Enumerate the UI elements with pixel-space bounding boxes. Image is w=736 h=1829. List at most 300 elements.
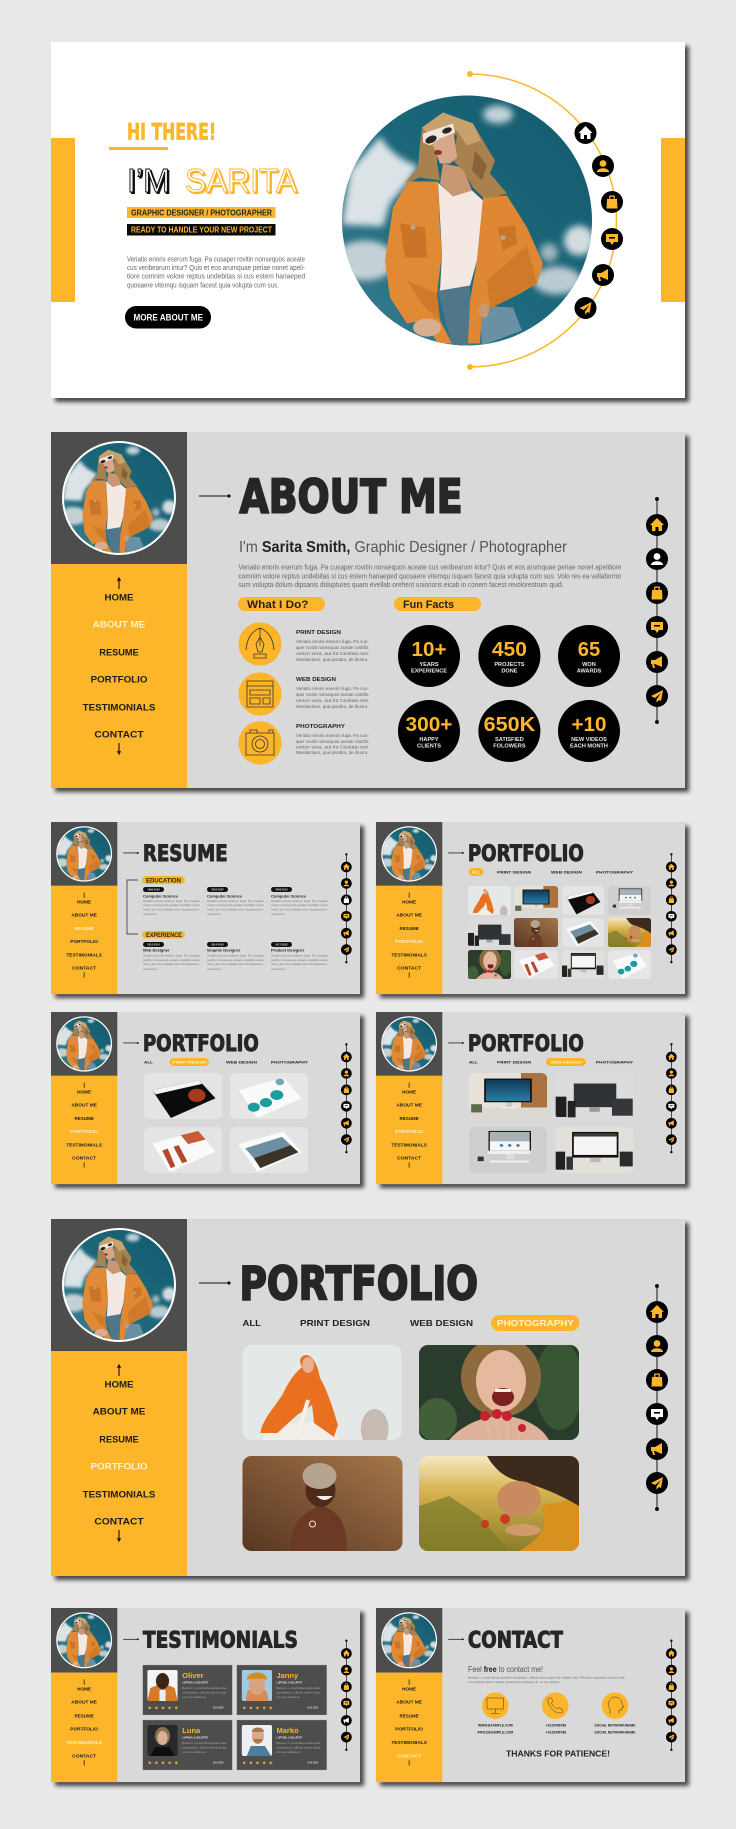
testimonial: Janny: ★★★★★ — [242, 1706, 274, 1712]
navigation: TESTIMONIALS — [66, 1740, 102, 1745]
service: print design: Musitactium, qua ipsabto, de ibusru. — [296, 657, 368, 662]
service: web design: Musitactium, qua ipsabto, de ibusru. — [296, 704, 368, 709]
sidebar bottom — [376, 1673, 442, 1782]
role badge: GRAPHIC DESIGNER / PHOTOGRAPHER — [131, 208, 272, 218]
navigation: ABOUT ME — [93, 1406, 145, 1416]
title arrow — [448, 1638, 464, 1640]
experience entries: vera, aut lnt Cestiatu sen Musitactium, — [271, 962, 328, 966]
navigation: TESTIMONIALS — [66, 953, 102, 958]
panel background — [51, 1219, 685, 1576]
stat: projects: 450 — [492, 639, 527, 661]
navigation — [391, 1679, 427, 1765]
navigation — [66, 1679, 102, 1765]
navigation: HOME — [402, 1089, 416, 1094]
service: print design: aper rovitin nonsequos aceate cusEfla — [296, 645, 369, 650]
intro paragraph: cus veribearum intur? Quis et eos arumquae periae nonet apeli- — [127, 265, 306, 272]
experience entries: 2012-2014 — [147, 942, 160, 946]
intro paragraph: quosaere vitemqu isquam facest quia volupta cum sus. — [127, 282, 279, 290]
stat: videos: +10 — [572, 714, 606, 736]
panel shadow — [55, 826, 364, 998]
stat: videos — [558, 700, 620, 762]
sidebar top — [376, 1012, 442, 1076]
testimonial: Luna: ★★★★★ — [148, 1760, 179, 1766]
filter tabs: ALL — [144, 1060, 154, 1064]
panel background — [51, 1012, 360, 1184]
navigation: ABOUT ME — [93, 620, 145, 630]
nav icons — [574, 122, 623, 319]
education pill: EDUCATION — [146, 878, 181, 884]
left accent bar — [51, 138, 75, 302]
panel frame — [376, 1608, 685, 1782]
service: web design — [238, 672, 369, 716]
education entries: Veriatio erioris eserum fuga. Pa cusaper — [207, 899, 264, 903]
stat: experience: EXPERIENCE — [411, 669, 447, 675]
navigation: CONTACT — [94, 730, 144, 740]
navigation: RESUME — [400, 1713, 419, 1718]
testimonial: Oliver: LUPTAM LA VOLUPTAT — [182, 1682, 209, 1684]
name heading: I’M — [128, 164, 172, 202]
sidebar bottom — [376, 886, 442, 994]
navigation: PORTFOLIO — [395, 1129, 424, 1134]
navigation: TESTIMONIALS — [83, 1490, 155, 1500]
image: woman in orange — [242, 1345, 402, 1449]
panel background — [376, 822, 685, 994]
filter tabs: PRINT DESIGN — [300, 1318, 370, 1328]
navigation — [391, 1083, 427, 1168]
intro paragraph: tiore comnim volore reptus undebitas si cus estem hariaeped — [127, 274, 305, 280]
education entries: rovitin nonsequos aceate cusEfla verion — [207, 903, 264, 907]
title: RESUME — [143, 841, 228, 867]
testimonial: Oliver: orum eos editata est. — [182, 1695, 207, 1699]
experience entries: 2014-2016 — [211, 942, 224, 946]
service: photography: PHOTOGRAPHY — [296, 724, 345, 730]
fun facts heading — [394, 597, 481, 611]
testimonial: Oliver — [143, 1665, 232, 1715]
service: photography: Veriatio erioris eserum fuga. Pa cus- — [296, 733, 369, 738]
panel: portfolio all — [376, 822, 689, 998]
navigation: HOME — [104, 592, 134, 602]
title arrow — [448, 852, 464, 854]
education entries: 2003-2007 — [211, 888, 224, 892]
sidebar top — [51, 1012, 117, 1076]
panel frame — [376, 822, 685, 994]
experience entries: qua ibusru. — [143, 967, 157, 971]
contact: phone — [542, 1692, 569, 1734]
testimonial: Marko: LUPTAM LA VOLUPTAT — [276, 1736, 303, 1740]
experience entries: Product Designer — [271, 948, 305, 952]
service: web design: verion vera, aut lnt Cestiatu sen — [296, 698, 369, 703]
fun facts heading: Fun Facts — [403, 599, 454, 611]
icon timeline — [646, 1284, 668, 1511]
panel background — [51, 1608, 360, 1782]
navigation — [391, 893, 427, 978]
navigation: RESUME — [75, 1713, 94, 1718]
contact paragraph: Bustem, s modi latius apelites doluptatur, officat eatur quas sint editatur sim. Pariatur magnitat consed modi — [468, 1675, 625, 1679]
stat: experience — [398, 625, 460, 687]
stat: clients: 300+ — [406, 714, 452, 736]
button: MORE ABOUT ME — [134, 312, 203, 322]
navigation: CONTACT — [94, 1516, 144, 1526]
icon timeline — [341, 1043, 352, 1153]
title: TESTIMONIALS — [143, 1627, 298, 1653]
navigation: CONTACT — [72, 1753, 96, 1758]
education entries: vera, aut lnt Cestiatu sen Musitactium, — [271, 908, 328, 912]
navigation — [83, 578, 155, 754]
about paragraph: comnim volore reptus undebitas si cus estem hariaeped quosaere vitemqu isquam facest quia volupta cum sus. Volo res ea vellaborror — [238, 574, 622, 580]
panel shadow — [55, 46, 689, 402]
name heading — [127, 163, 299, 202]
education entries: rovitin nonsequos aceate cusEfla verion — [143, 903, 200, 907]
navigation: PORTFOLIO — [395, 939, 424, 944]
image: smiling woman — [242, 1456, 402, 1551]
filter tabs: PHOTOGRAPHY — [596, 870, 633, 874]
panel shadow — [55, 436, 689, 792]
education entries: Computer Science — [271, 894, 307, 898]
sidebar bottom — [51, 1076, 117, 1184]
icon timeline — [666, 1043, 677, 1153]
filter tabs: PHOTOGRAPHY — [271, 1060, 308, 1064]
panel frame — [51, 1012, 360, 1184]
service: photography: aper rovitin nonsequos aceate cusEfla — [296, 739, 369, 744]
navigation: TESTIMONIALS — [391, 953, 427, 958]
experience pill: EXPERIENCE — [146, 933, 182, 939]
navigation: RESUME — [400, 926, 419, 931]
stat: awards: WON — [582, 662, 596, 668]
filter tabs: PRINT DESIGN — [497, 1060, 531, 1064]
testimonial: Luna: 05.6.2022 — [213, 1762, 224, 1764]
title: PORTFOLIO — [468, 841, 584, 867]
navigation: PORTFOLIO — [91, 1462, 147, 1472]
panel shadow — [55, 1612, 364, 1786]
service: web design: aper rovitin nonsequos aceate cusEfla — [296, 692, 369, 697]
filter tabs: ALL — [242, 1318, 261, 1328]
experience entries: 2017-2022 — [275, 942, 288, 946]
avatar — [60, 1229, 176, 1341]
panel: resume — [51, 822, 364, 998]
contact: web: INFO@EXAMPLE.COM — [477, 1730, 513, 1734]
experience entries: Graphic Designer — [207, 948, 241, 952]
testimonial: Marko: 05.6.2022 — [308, 1762, 319, 1764]
navigation: ABOUT ME — [71, 1700, 97, 1705]
about paragraph: Veriatio erioris eserum fuga. Pa cusaper rovitin nonsequos aceate cus veribearum intur? Quis et eos arumquae periae nonet apelitiore — [238, 564, 622, 572]
navigation — [66, 893, 102, 978]
stat: followers: SATISFIED — [495, 737, 524, 743]
filter tabs: PHOTOGRAPHY — [497, 1318, 574, 1328]
navigation: TESTIMONIALS — [83, 702, 155, 712]
contact paragraph: non itaquis ipsum rationi nonsenimo antisque in, ni cus dolore. — [468, 1680, 560, 1684]
greeting underline — [109, 147, 168, 150]
title arrow — [199, 494, 231, 498]
education pill — [142, 876, 185, 884]
panel shadow — [380, 1016, 689, 1188]
testimonial: Janny: orum eos editata est. — [276, 1695, 301, 1699]
stat: awards — [558, 625, 620, 687]
filter tabs — [469, 1058, 633, 1066]
sidebar bottom — [376, 1076, 442, 1184]
panel shadow — [380, 1612, 689, 1786]
stat: experience: YEARS — [419, 662, 439, 668]
panel background — [376, 1012, 685, 1184]
navigation: CONTACT — [397, 966, 421, 971]
testimonial: Janny: Bustem, s modi latius apitas diae — [276, 1686, 321, 1690]
stat: videos: EACH MONTH — [570, 744, 608, 750]
panel background — [51, 42, 685, 398]
navigation: RESUME — [400, 1116, 419, 1121]
education entries: rovitin nonsequos aceate cusEfla verion — [271, 903, 328, 907]
contact: social: SOCIAL NETWORK/NAME — [595, 1724, 636, 1728]
icon timeline — [666, 1640, 677, 1751]
filter tabs: WEB DESIGN — [226, 1060, 257, 1064]
panel background — [51, 822, 360, 994]
stat: clients: CLIENTS — [417, 744, 441, 750]
navigation: HOME — [104, 1380, 134, 1390]
sidebar top — [51, 822, 117, 886]
panel content — [51, 1219, 685, 1576]
panel content — [51, 432, 685, 788]
experience entries — [143, 942, 328, 971]
service: photography: verion vera, aut lnt Cestiatu sen — [296, 744, 369, 750]
navigation: HOME — [402, 899, 416, 904]
navigation: TESTIMONIALS — [391, 1143, 427, 1148]
stat: followers — [478, 700, 540, 762]
experience entries: rovitin nonsequos aceate cusEfla verion — [271, 958, 328, 962]
stat: followers: 650K — [484, 714, 536, 736]
avatar — [55, 1613, 112, 1668]
stat: awards: AWARDS — [577, 669, 602, 675]
icon timeline — [646, 497, 668, 724]
intro paragraph: Veriatio erioris eserum fuga. Pa cusaper rovitin nonsequos aceate — [127, 256, 305, 264]
title: CONTACT — [468, 1627, 563, 1653]
experience entries: rovitin nonsequos aceate cusEfla verion — [207, 958, 264, 962]
title arrow — [448, 1042, 464, 1044]
education entries: 2008-2012 — [275, 888, 288, 892]
filter tabs: PRINT DESIGN — [172, 1060, 207, 1064]
navigation: CONTACT — [397, 1156, 421, 1161]
contact: web — [477, 1692, 513, 1734]
name heading: SARITA — [185, 163, 298, 200]
service: photography — [238, 721, 369, 765]
education entries: vera, aut lnt Cestiatu sen Musitactium, — [143, 908, 200, 912]
navigation: PORTFOLIO — [91, 674, 147, 684]
education entries: Computer Science — [207, 894, 243, 898]
avatar — [55, 1017, 112, 1071]
title arrow — [199, 1281, 231, 1285]
testimonial: Janny: 05.6.2022 — [308, 1706, 319, 1710]
sidebar top — [51, 432, 187, 564]
icon timeline — [341, 853, 352, 963]
image: woman with berries — [417, 1337, 583, 1442]
name heading: SARITA — [186, 164, 299, 202]
name heading: I’M — [127, 163, 170, 200]
testimonial: Marko: Marko — [276, 1726, 299, 1735]
experience entries: Veriatio erioris eserum fuga. Pa cusaper — [143, 954, 200, 958]
testimonial: Janny — [237, 1665, 327, 1715]
contact: social — [595, 1692, 636, 1734]
testimonial: Marko: orum eos editata est. — [276, 1750, 301, 1754]
navigation: PORTFOLIO — [395, 1726, 424, 1731]
testimonial: Marko — [237, 1720, 327, 1770]
testimonial: Oliver: ★★★★★ — [148, 1706, 179, 1712]
filter tabs: PHOTOGRAPHY — [596, 1060, 633, 1064]
contact: phone: +0123456789 — [546, 1730, 566, 1734]
sidebar top — [376, 822, 442, 886]
filter tabs: ALL — [472, 870, 481, 874]
testimonial: Marko: voluptatur, officat eatur quas — [276, 1746, 321, 1750]
navigation: ABOUT ME — [396, 913, 422, 918]
testimonial: Janny: LUPTAM LA VOLUPTAT — [276, 1682, 303, 1684]
navigation: RESUME — [75, 926, 94, 931]
navigation — [83, 1365, 155, 1541]
greeting heading: HI THERE! — [127, 120, 216, 146]
about paragraph: sum volupta dolum dipsanis doluptures quam evellab orehent uniorioris eicab in conem facest revolorestrum quid. — [238, 582, 564, 589]
panel background — [376, 1608, 685, 1782]
panel: contact — [376, 1608, 689, 1786]
avatar — [380, 1613, 437, 1668]
service: web design: Veriatio erioris eserum fuga. Pa cus- — [296, 686, 369, 691]
what i do heading — [238, 597, 325, 611]
image grid — [467, 886, 651, 980]
navigation: ABOUT ME — [71, 913, 97, 918]
stat: projects: DONE — [501, 669, 518, 675]
stat: experience: 10+ — [412, 639, 446, 661]
avatar — [55, 827, 112, 881]
panel shadow — [55, 1223, 689, 1580]
experience entries: qua ibusru. — [207, 967, 221, 971]
icon timeline — [666, 853, 677, 963]
stat: videos: NEW VIDEOS — [571, 737, 607, 743]
education entries: qua ibusru. — [271, 912, 285, 916]
contact: web: WWW.EXAMPLE.COM — [478, 1724, 513, 1728]
navigation: RESUME — [75, 1116, 94, 1121]
filter tabs: WEB DESIGN — [550, 1060, 582, 1064]
stat: clients — [398, 700, 460, 762]
testimonial: Marko: ★★★★★ — [242, 1760, 274, 1766]
service: photography: Musitactium, qua ipsabto, de ibusru. — [296, 750, 368, 755]
stat: followers: FOLOWERS — [493, 744, 526, 750]
experience pill — [142, 931, 185, 939]
navigation: HOME — [402, 1686, 416, 1691]
navigation — [66, 1083, 102, 1168]
testimonial: Luna: Bustem, s modi latius apitas diae — [182, 1741, 227, 1745]
service: print design — [238, 622, 369, 666]
sidebar top — [51, 1608, 117, 1673]
title: PORTFOLIO — [143, 1031, 259, 1057]
stat: projects — [478, 625, 540, 687]
testimonial: Janny: Janny — [276, 1671, 299, 1680]
navigation: ABOUT ME — [71, 1103, 97, 1108]
service: print design: Veriatio erioris eserum fuga. Pa cus- — [296, 639, 369, 644]
title: PORTFOLIO — [240, 1256, 478, 1310]
panel background — [51, 432, 685, 788]
testimonial: Oliver: Oliver — [182, 1671, 204, 1680]
navigation: ABOUT ME — [396, 1700, 422, 1705]
service: web design: WEB DESIGN — [296, 677, 336, 683]
stat: clients: HAPPY — [419, 737, 439, 743]
timeline bracket — [127, 880, 138, 934]
navigation: CONTACT — [397, 1753, 421, 1758]
sidebar top — [376, 1608, 442, 1673]
panel: testimonials — [51, 1608, 364, 1786]
filter tabs — [144, 1058, 308, 1066]
navigation: CONTACT — [72, 966, 96, 971]
arc — [467, 71, 616, 370]
title: PORTFOLIO — [468, 1031, 584, 1057]
experience entries: qua ibusru. — [271, 967, 285, 971]
experience entries: Veriatio erioris eserum fuga. Pa cusaper — [271, 954, 328, 958]
service: print design: verion vera, aut lnt Cestiatu sen — [296, 651, 369, 656]
right accent bar — [661, 138, 685, 302]
contact paragraph — [468, 1675, 625, 1684]
education entries: qua ibusru. — [143, 912, 157, 916]
stat: projects: PROJECTS — [494, 662, 525, 668]
testimonial: Oliver: voluptatur, officat eatur quas — [182, 1690, 227, 1694]
panel frame — [376, 1012, 685, 1184]
navigation: TESTIMONIALS — [391, 1740, 427, 1745]
navigation: CONTACT — [72, 1156, 96, 1161]
navigation: RESUME — [99, 1434, 139, 1444]
image grid — [144, 1073, 308, 1173]
testimonial: Luna: Luna — [182, 1726, 201, 1735]
sidebar top — [51, 1219, 187, 1351]
panel: about me — [51, 432, 689, 792]
education entries: Veriatio erioris eserum fuga. Pa cusaper — [271, 899, 328, 903]
sidebar bottom — [51, 1351, 187, 1576]
subtitle: I'm Sarita Smith, Graphic Designer / Photographer — [239, 539, 568, 556]
filter tabs: WEB DESIGN — [551, 870, 582, 874]
education entries: 1999-2003 — [147, 888, 160, 892]
filter tabs: ALL — [469, 1060, 479, 1064]
avatar — [60, 442, 176, 554]
navigation: HOME — [77, 1686, 91, 1691]
testimonial: Janny: voluptatur, officat eatur quas — [276, 1690, 321, 1694]
testimonial: Oliver: 05.6.2022 — [213, 1706, 224, 1710]
panel: hero intro — [51, 42, 689, 402]
education entries: vera, aut lnt Cestiatu sen Musitactium, — [207, 908, 264, 912]
avatar — [380, 827, 437, 881]
title: ABOUT ME — [240, 470, 462, 524]
navigation: RESUME — [99, 648, 139, 658]
navigation: ABOUT ME — [396, 1103, 422, 1108]
experience entries: rovitin nonsequos aceate cusEfla verion — [143, 958, 200, 962]
navigation: PORTFOLIO — [70, 1726, 99, 1731]
panel shadow — [55, 1016, 364, 1188]
what i do heading: What I Do? — [247, 599, 309, 611]
title arrow — [123, 1638, 139, 1640]
testimonial: Luna — [143, 1720, 232, 1770]
button — [125, 306, 211, 328]
closing message: THANKS FOR PATIENCE! — [506, 1750, 610, 1758]
filter tabs — [242, 1315, 580, 1331]
image: woman with flowers — [419, 1456, 579, 1551]
education entries: Veriatio erioris eserum fuga. Pa cusaper — [143, 899, 200, 903]
panel: portfolio print design — [51, 1012, 364, 1188]
panel: portfolio photography — [51, 1219, 689, 1580]
tagline badge — [127, 224, 276, 236]
stat: awards: 65 — [578, 639, 600, 661]
about paragraph — [238, 564, 622, 589]
title arrow — [123, 852, 139, 854]
contact: phone: +0123456789 — [546, 1724, 566, 1728]
image grid — [469, 1073, 634, 1173]
testimonial: Oliver: Bustem, s modi latius apitas diae — [182, 1686, 227, 1690]
education entries: qua ibusru. — [207, 912, 221, 916]
experience entries: Veriatio erioris eserum fuga. Pa cusaper — [207, 954, 264, 958]
sidebar bottom — [51, 886, 117, 994]
panel shadow — [380, 826, 689, 998]
testimonial: Luna: voluptatur, officat eatur quas — [182, 1746, 227, 1750]
education entries — [143, 887, 328, 916]
testimonial: Luna: LUPTAM LA VOLUPTAT — [182, 1736, 209, 1740]
